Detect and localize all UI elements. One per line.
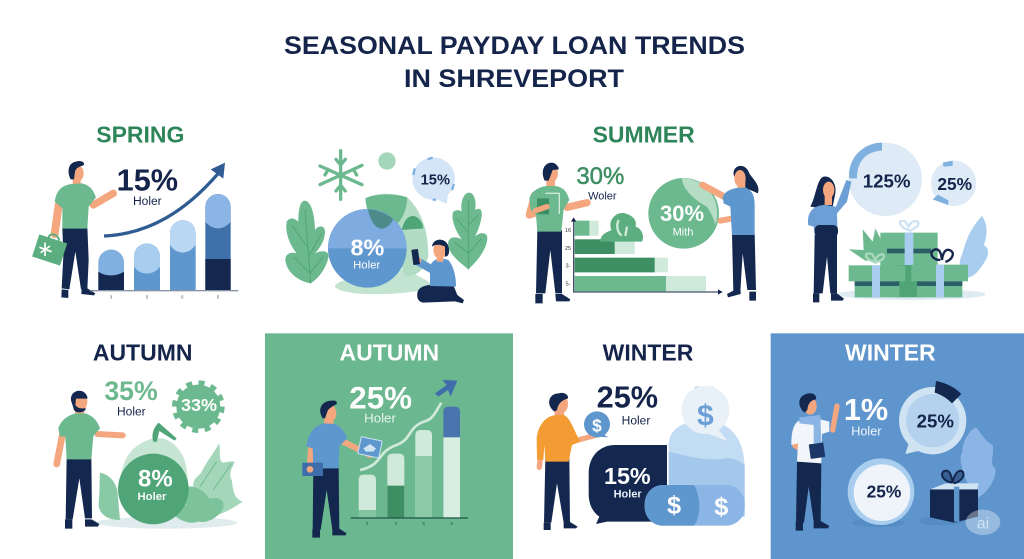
ring stat 125%: 125% [863,170,911,191]
bar chart: 5 [422,521,425,526]
ring stat 25% [931,161,976,206]
stat 35%: 35% [104,376,158,406]
stat 30%: Woler [588,191,617,203]
speech bubble 15% [589,445,667,524]
stat 25%: Holer [364,411,396,426]
heading: winter: WINTER [603,340,694,366]
heading: winter white: WINTER [845,340,936,366]
gift boxes [849,221,968,297]
panel: spring chart [32,121,238,299]
pie 30%: Mith [673,226,693,238]
coin bubble: $ [697,400,714,433]
pie 8%: Holer [353,260,380,272]
person gesturing [57,391,123,529]
pie 8%: 8% [350,234,384,260]
green dot [378,152,396,170]
bar chart: 3 [110,294,113,299]
bar chart: 6 [181,294,184,299]
horizontal bar chart: 3- [565,263,571,269]
dollar bubble [584,411,610,437]
person in orange [537,393,598,530]
bar chart: 3 [394,521,397,526]
ground shadow [838,289,986,300]
ring stat 125% [849,143,922,216]
stat 15%: Holer [133,194,162,208]
heading: autumn white: AUTUMN [340,340,439,366]
speech ring 25% [899,381,966,454]
ring 25% [848,458,914,527]
title [284,32,745,93]
person with tablet [302,401,382,538]
heading: summer: SUMMER [593,121,695,147]
stat 25%: 25% [349,380,412,415]
coin bubble [681,386,729,441]
ring stat 25%: 25% [937,174,972,194]
dollar bubble: $ [592,415,602,435]
woman raising arm [808,176,851,302]
stat 1%: Holer [851,425,881,439]
ring 25%: 25% [867,482,901,502]
horizontal bar chart: 25 [565,246,571,252]
icon: green leaves [849,228,882,261]
person with tablet [529,163,587,303]
green bag [335,194,433,294]
circle 8%: 8% [138,466,173,493]
horizontal bar chart: 16 [565,228,571,234]
panel: autumn illustration [57,340,243,529]
panel: winter blue [771,333,1024,559]
speech bubble 15% [412,157,455,204]
woman holding pie [703,166,758,301]
title: IN SHREVEPORT [404,65,624,93]
panel: spring illustration [285,151,487,303]
panel: winter money [537,340,745,530]
stat 1%: 1% [844,393,888,427]
bar chart: 3 [366,521,369,526]
icon: leaves [285,193,487,283]
person with shopping bag [32,161,113,298]
ground shadow [96,517,237,529]
watermark badge [966,510,1000,535]
icon: snowflake [320,151,362,199]
bar chart: 5 [146,294,149,299]
stat 30% [576,163,624,203]
icon: melon bag [120,423,188,497]
bar chart: 5 [217,294,220,299]
speech bubble 15%: 15% [421,173,450,189]
money jug [669,387,745,517]
circle 8% [118,454,189,524]
bar chart [351,407,468,526]
stat 35%: Holer [117,404,146,418]
badge 33%: 33% [181,395,217,415]
icon: leaves [99,443,243,527]
icon: blue leaf [960,216,988,278]
stat 25%: 25% [597,380,658,414]
title: SEASONAL PAYDAY LOAN TRENDS [284,32,745,60]
seated person [411,240,464,303]
horizontal bar chart [565,217,723,295]
horizontal bar chart: 5- [565,281,571,287]
icon: green bush [600,213,643,242]
stat 15%: 15% [117,163,178,197]
panel: summer gifts [808,143,988,302]
circle 8%: Holer [138,491,167,503]
panel: summer chart [529,121,758,303]
trend arrow [104,163,225,236]
dollar pill [645,485,745,526]
speech ring 25%: 25% [917,410,954,431]
heading: spring: SPRING [96,121,184,147]
bar chart: 6 [450,521,453,526]
badge 33% [175,383,222,430]
pie 30%: 30% [660,201,704,226]
bar chart [90,194,238,299]
speech bubble 15%: Holer [614,488,642,500]
stat 30%: 30% [576,163,624,190]
speech bubble 15%: 15% [604,463,651,489]
gift and leaf [919,427,996,525]
heading: autumn: AUTUMN [93,340,192,366]
dollar pill: $ [667,492,681,520]
dollar pill: $ [714,493,728,521]
trend line and arrow [360,380,457,470]
pie 30% [648,178,719,249]
panel: autumn green [265,333,513,559]
stat 25%: Holer [622,413,650,427]
person with scarf [791,393,837,531]
pie 8% [328,209,407,288]
watermark badge: ai [977,515,989,532]
